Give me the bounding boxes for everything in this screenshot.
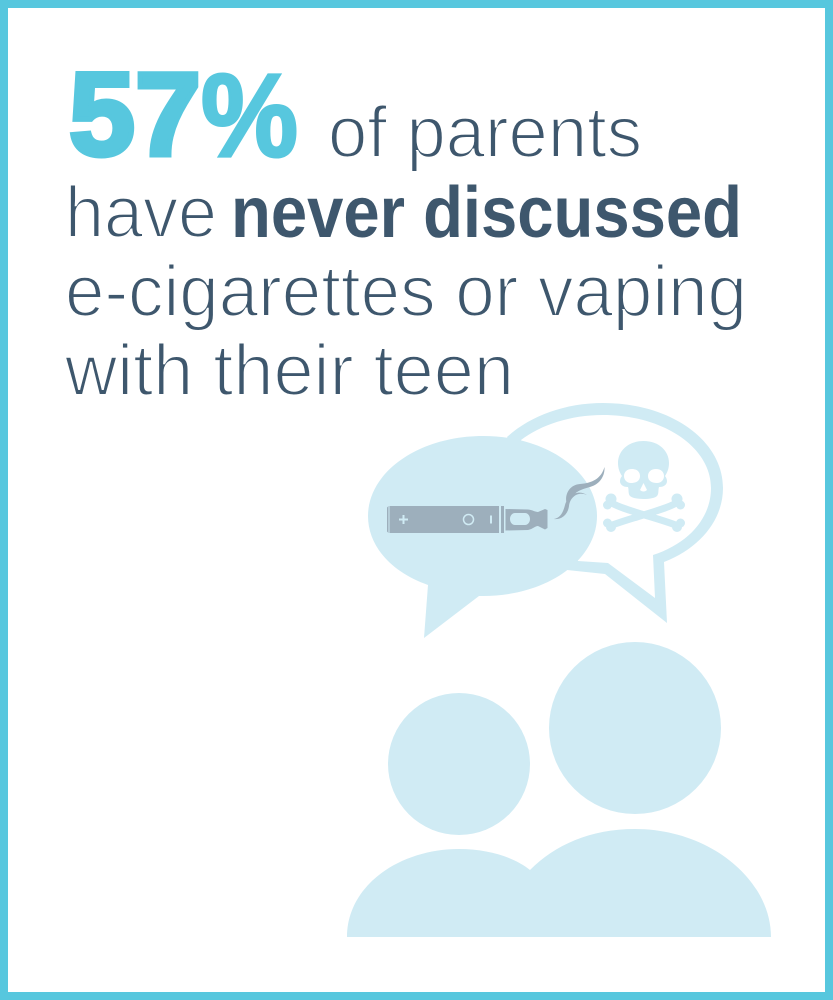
icon: crossbones — [603, 494, 685, 532]
icon: outlined speech bubble with skull — [507, 403, 723, 623]
bubble outline — [507, 403, 723, 623]
heading line 2: have — [65, 173, 217, 253]
icon: vapour — [554, 467, 605, 519]
big statistic 57: 57 — [69, 49, 201, 181]
heading line 2 bold: never discussed — [231, 173, 742, 253]
vape body — [387, 506, 499, 533]
heading line 1: of parents — [328, 93, 642, 173]
teen head — [388, 693, 530, 835]
icon: skull — [618, 441, 669, 499]
icon: adult and teen silhouettes — [347, 642, 771, 937]
icon: vape pen — [387, 506, 548, 533]
parent head — [549, 642, 721, 814]
vape buttons — [399, 514, 491, 524]
big statistic percent sign: % — [201, 50, 298, 182]
heading line 3: e-cigarettes or vaping — [65, 252, 747, 332]
vape mouthpiece — [506, 509, 548, 530]
heading — [64, 49, 747, 411]
heading line 4: with their teen — [64, 331, 514, 411]
bodies — [347, 829, 771, 937]
icon: filled speech bubble — [368, 436, 597, 638]
